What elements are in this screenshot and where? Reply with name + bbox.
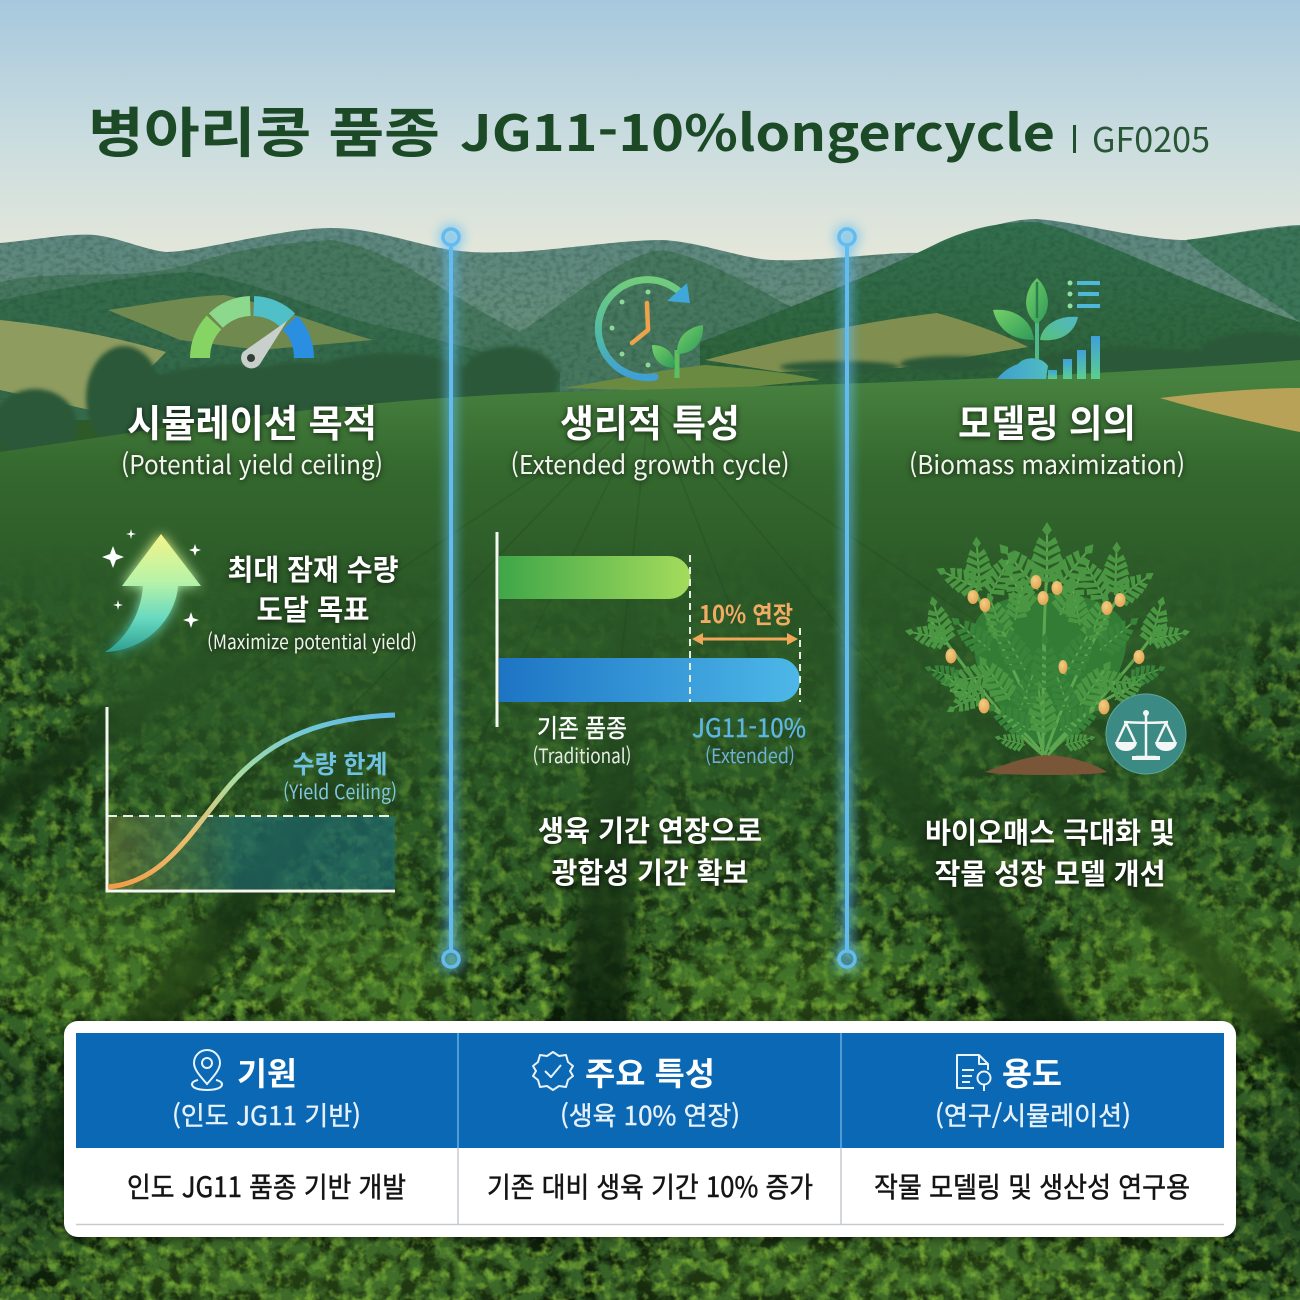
title: JG11-10%longercycle [460, 94, 1055, 166]
chart: yield ceiling curve [107, 707, 397, 891]
icon: document with pin [957, 1055, 990, 1091]
heading [510, 393, 790, 482]
tree lines [0, 332, 1300, 461]
text: yield target: 도달 목표 [256, 587, 370, 629]
chart: growth duration bars: (Traditional) [532, 740, 632, 769]
title [88, 89, 1210, 168]
meadows [0, 320, 166, 410]
table column: origin: (인도 JG11 기반) [172, 1096, 361, 1133]
icon: plant with data bars [993, 278, 1100, 379]
text: biomass caption: 바이오매스 극대화 및 [925, 810, 1175, 852]
heading: (Potential yield ceiling) [121, 445, 383, 482]
heading [121, 393, 383, 482]
field row furrows [0, 620, 1300, 1196]
heading: 시뮬레이션 목적 [127, 393, 377, 448]
vertical divider left [443, 229, 459, 967]
heading: (Biomass maximization) [909, 445, 1185, 482]
text: biomass caption [925, 810, 1175, 893]
text: growth period caption: 광합성 기간 확보 [552, 850, 748, 892]
illustration: chickpea plant [902, 522, 1192, 775]
field base [0, 360, 1300, 1300]
title: 병아리콩 품종 [88, 89, 440, 168]
table column: use [874, 1049, 1190, 1206]
chart: growth duration bars: (Extended) [705, 740, 795, 769]
heading: (Extended growth cycle) [510, 445, 790, 482]
faint crop row lines [120, 400, 1180, 760]
chart: yield ceiling curve: (Yield Ceiling) [283, 776, 397, 805]
vertical divider right [839, 229, 855, 967]
icon: yield gauge [200, 306, 304, 368]
text: yield target: 최대 잠재 수량 [228, 547, 398, 589]
chart: growth duration bars: 기존 품종 [537, 709, 627, 745]
table column: origin [127, 1049, 406, 1206]
table column: use: (연구/시뮬레이션) [935, 1096, 1131, 1133]
chart: growth duration bars: JG11-10% [692, 709, 806, 745]
foliage clumps [0, 890, 1300, 1300]
hill tree texture [0, 215, 1300, 405]
table column: use: 작물 모델링 및 생산성 연구용 [874, 1166, 1190, 1206]
panel: simulation purpose [102, 306, 417, 891]
chart: growth duration bars: 10% 연장 [699, 595, 793, 630]
icon: clock with sprout [598, 280, 703, 378]
icon: verified badge [533, 1052, 573, 1090]
text: yield target: (Maximize potential yield) [207, 626, 417, 655]
table column: key traits: 기존 대비 생육 기간 10% 증가 [487, 1166, 813, 1206]
table column: key traits: (생육 10% 연장) [560, 1096, 740, 1133]
icon: balance badge [1106, 694, 1186, 774]
table column: key traits [487, 1049, 813, 1206]
heading: 생리적 특성 [560, 393, 740, 448]
heading [909, 393, 1185, 482]
table column: origin: 인도 JG11 품종 기반 개발 [127, 1166, 406, 1206]
heading: 모델링 의의 [958, 393, 1136, 448]
table column: key traits: 주요 특성 [585, 1049, 715, 1095]
panel: physiological traits [497, 280, 806, 892]
icon: rising arrow with sparkles [102, 529, 201, 652]
text: growth period caption: 생육 기간 연장으로 [538, 808, 762, 850]
text: biomass caption: 작물 성장 모델 개선 [934, 851, 1166, 893]
title: GF0205 [1092, 113, 1210, 162]
summary table card [64, 1021, 1236, 1237]
chart: growth duration bars [497, 532, 806, 769]
field foliage texture [0, 595, 1300, 1300]
chart: yield ceiling curve: 수량 한계 [292, 745, 388, 781]
icon: location pin [192, 1050, 222, 1090]
panel: modelling significance [902, 278, 1192, 893]
text: growth period caption [538, 808, 762, 892]
table column: use: 용도 [1002, 1049, 1062, 1095]
table column: origin: 기원 [237, 1049, 297, 1095]
text: yield target [207, 547, 417, 655]
